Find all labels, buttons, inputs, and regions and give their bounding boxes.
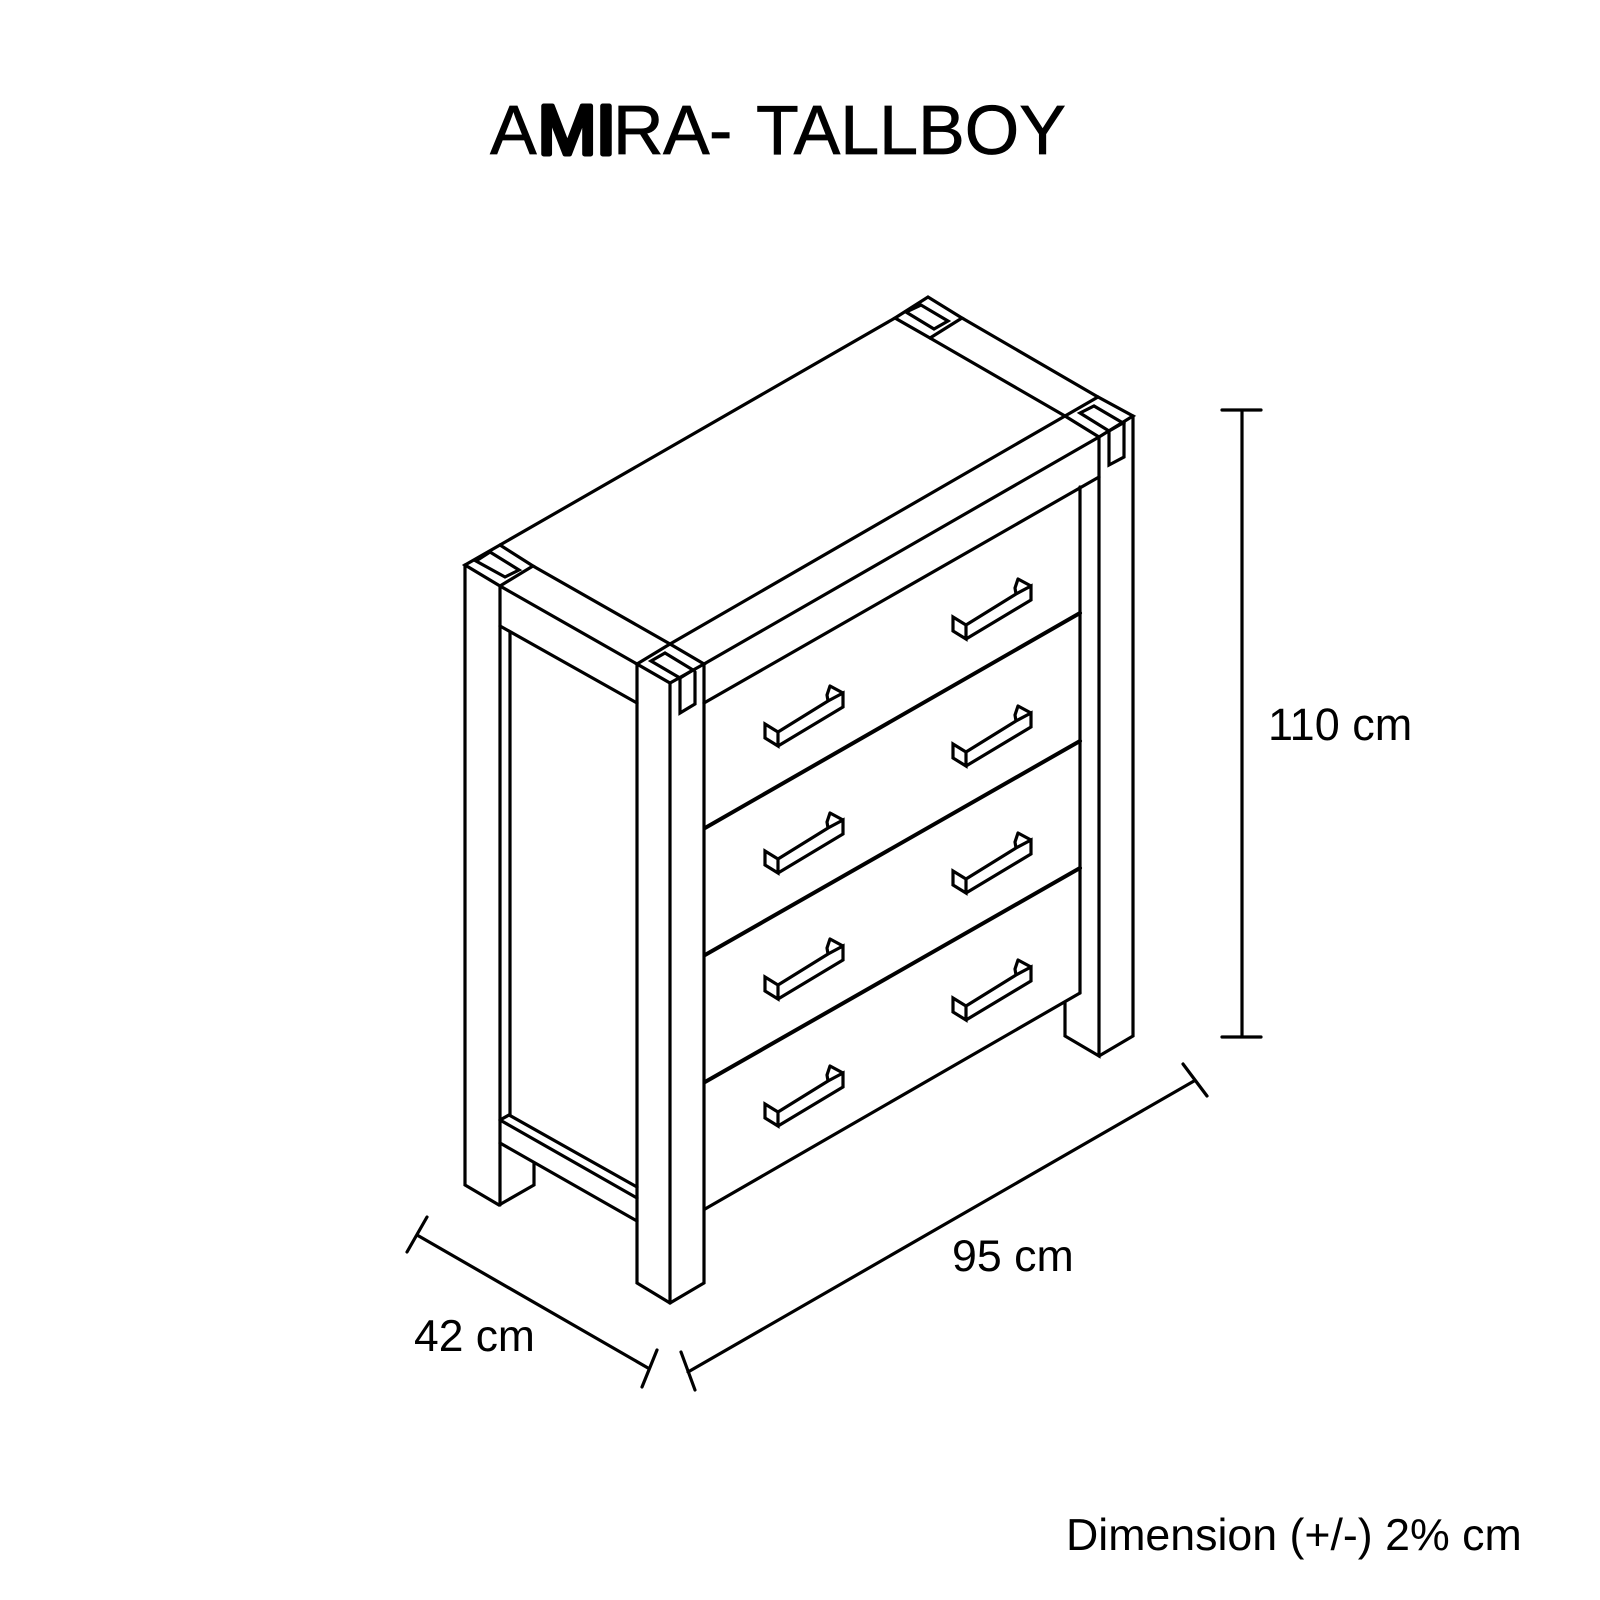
- depth dimension: [407, 1217, 657, 1387]
- width label: 95 cm: [952, 1232, 1074, 1281]
- title: A: [490, 91, 537, 169]
- height label: 110 cm: [1268, 699, 1412, 750]
- title: MI: [538, 91, 616, 169]
- title: -: [709, 91, 732, 169]
- tolerance note: Dimension (+/-) 2% cm: [1066, 1511, 1522, 1560]
- rear right post: [1065, 416, 1133, 1056]
- left side panel: [465, 565, 637, 1221]
- height dimension: [1222, 410, 1261, 1037]
- drawer handles: [765, 579, 1031, 1126]
- drawer fronts: [705, 613, 1080, 1209]
- depth label: 42 cm: [414, 1312, 535, 1361]
- width dimension: [681, 1064, 1207, 1390]
- title: TALLBOY: [756, 91, 1066, 169]
- title: A: [663, 91, 710, 169]
- mortise slots: [476, 305, 1124, 713]
- tallboy line drawing: [465, 297, 1133, 1303]
- top surface: [465, 297, 1133, 703]
- title: R: [613, 91, 664, 169]
- front post: [637, 664, 704, 1303]
